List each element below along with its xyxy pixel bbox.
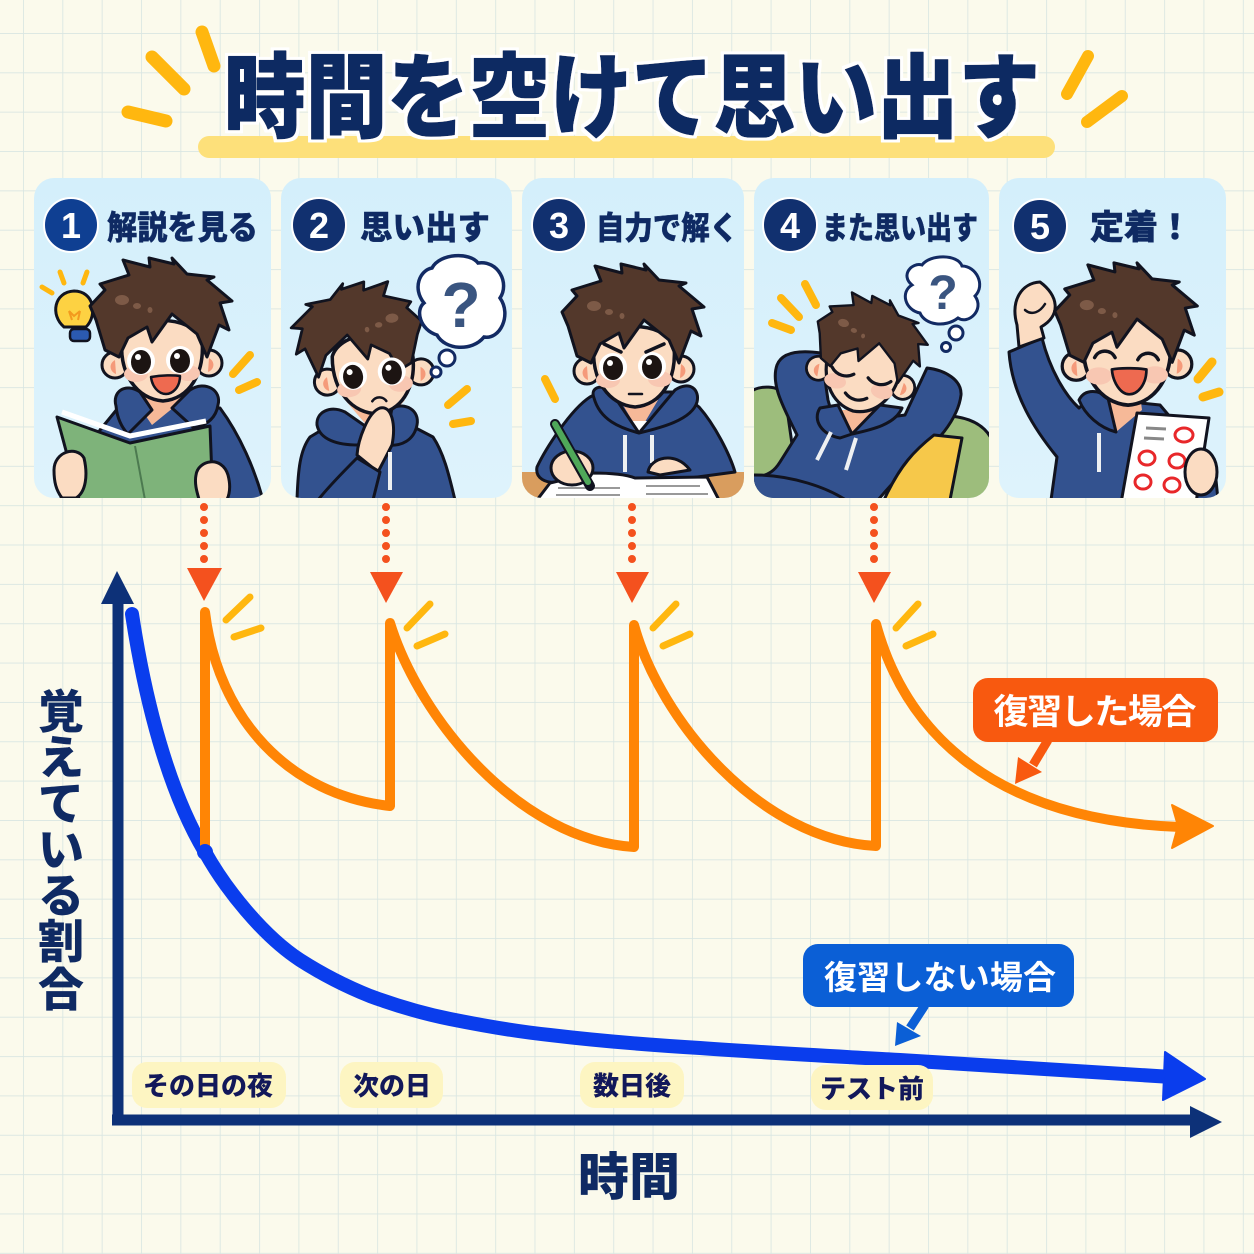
step number 5: 5 [1030,206,1050,247]
y axis label: る [38,870,84,922]
spark 3 [545,379,555,399]
step number 1: 1 [61,205,81,246]
tag: next day [340,1062,443,1108]
title underline highlight [198,136,1055,158]
thought bubble 4 [905,257,980,352]
heading 2: 思い出す [360,209,490,246]
step number 4: 4 [780,205,800,246]
sparks 1 [233,355,257,390]
icon: light bulb [42,272,93,341]
step number 2 [292,198,346,252]
tag: that night [132,1062,286,1108]
thought bubble 2 [418,256,505,377]
character 5 cheering [1009,263,1218,503]
tag: that night: その日の夜 [143,1071,273,1101]
sparks 4 [772,284,816,330]
x axis label: 時間 [578,1149,680,1206]
callout: with review: 復習した場合 [994,693,1196,732]
arrow: dotted 1 [187,507,222,601]
character 1 reading [54,258,263,503]
y axis label: て [38,778,84,830]
tag: next day: 次の日 [353,1071,431,1101]
heading 3: 自力で解く [596,210,738,246]
y axis [101,571,134,1125]
arrow: dotted 3 [616,507,649,603]
panel: step 5 mastered [999,178,1226,503]
heading 5: 定着！ [1090,209,1192,247]
panel: step 1 explanation [34,178,271,503]
thought bubble 4: ? [928,267,958,320]
panel: step 4 recall again [750,178,992,503]
character 2 thinking [288,276,455,500]
arrow: dotted 2 [370,507,403,603]
heading 1: 解説を見る [107,209,258,246]
tag: few days later: 数日後 [593,1071,671,1101]
sparks 5 [1198,362,1219,397]
step number 4 [763,198,817,252]
panel: step 2 recall [281,178,512,500]
title: 時間を空けて思い出す [224,48,1040,150]
step number 2: 2 [309,205,329,246]
step number 5 [1013,199,1067,253]
y axis label: 割 [38,916,84,968]
step number 1 [44,198,98,252]
curve: no review [132,614,1205,1100]
callout: without review [803,944,1074,1046]
callout: with review [973,678,1218,784]
thought bubble 2: ? [441,269,481,341]
callout: without review: 復習しない場合 [824,959,1056,996]
chart: forgetting curves [38,571,1222,1206]
x axis [112,1106,1222,1138]
heading 4: また思い出す [822,211,978,246]
icon: right title sparks [1067,56,1122,122]
tag: few days later [580,1062,684,1108]
step number 3 [532,198,586,252]
tag: before test [811,1065,933,1110]
y axis label: 覚 [38,686,84,738]
icon: left title sparks [128,32,214,121]
character 4 resting on sofa [750,285,992,503]
step number 3: 3 [549,205,569,246]
y axis label: 合 [38,964,84,1016]
sparks at peaks [226,597,933,646]
y axis label: え [38,732,84,784]
desk [522,472,744,498]
y axis label: い [38,824,84,876]
curve: with review [197,612,1213,860]
tag: before test: テスト前 [820,1074,924,1104]
sparks 2 [448,389,471,424]
character 3 studying [537,264,735,500]
arrow: dotted 4 [858,507,891,603]
panel: step 3 solve [522,178,744,500]
